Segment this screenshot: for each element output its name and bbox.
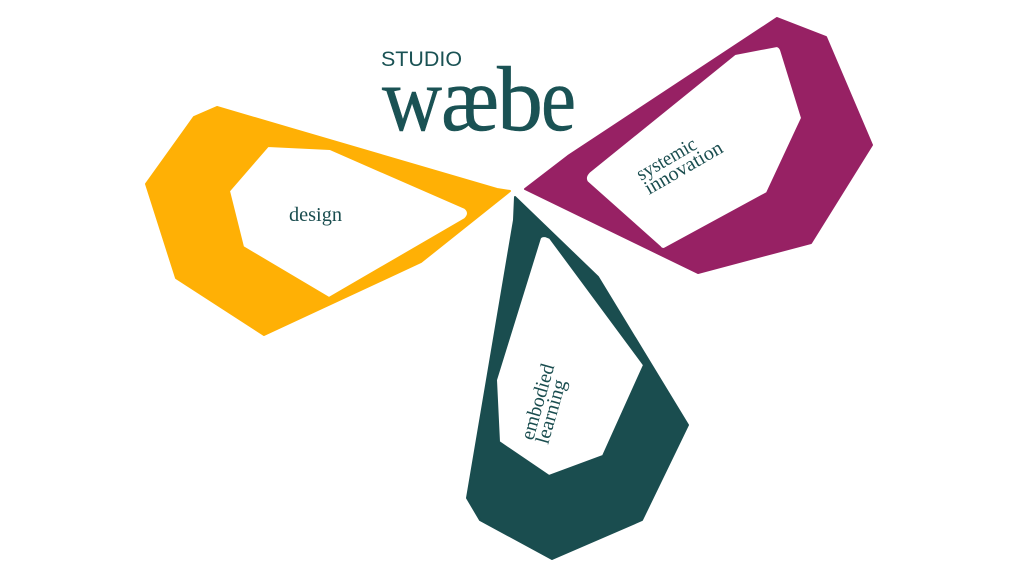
logo word: waebe: [382, 48, 576, 150]
label: design: design: [289, 204, 342, 226]
label: systemic innovation: [632, 133, 727, 199]
label line: innovation: innovation: [640, 137, 727, 199]
dark teal shape with white inner window: [467, 197, 688, 559]
letter: ae: æ: [441, 48, 499, 150]
label line: learning: learning: [532, 377, 571, 446]
label line: systemic: systemic: [632, 133, 701, 185]
logo word: studio: STUDIO: [381, 48, 462, 71]
magenta shape with white inner window: [525, 18, 872, 273]
yellow shape with white inner window: [146, 107, 510, 335]
letter: e: e: [541, 48, 576, 150]
letter: b: b: [497, 48, 543, 150]
logo: studio waebe: [381, 48, 576, 150]
petal: embodied learning: [467, 197, 688, 559]
label line: embodied: embodied: [517, 361, 559, 442]
label: embodied learning: [517, 361, 571, 446]
letter: w: w: [382, 48, 442, 150]
petal: systemic innovation: [525, 18, 872, 273]
petal: design: [146, 107, 510, 335]
